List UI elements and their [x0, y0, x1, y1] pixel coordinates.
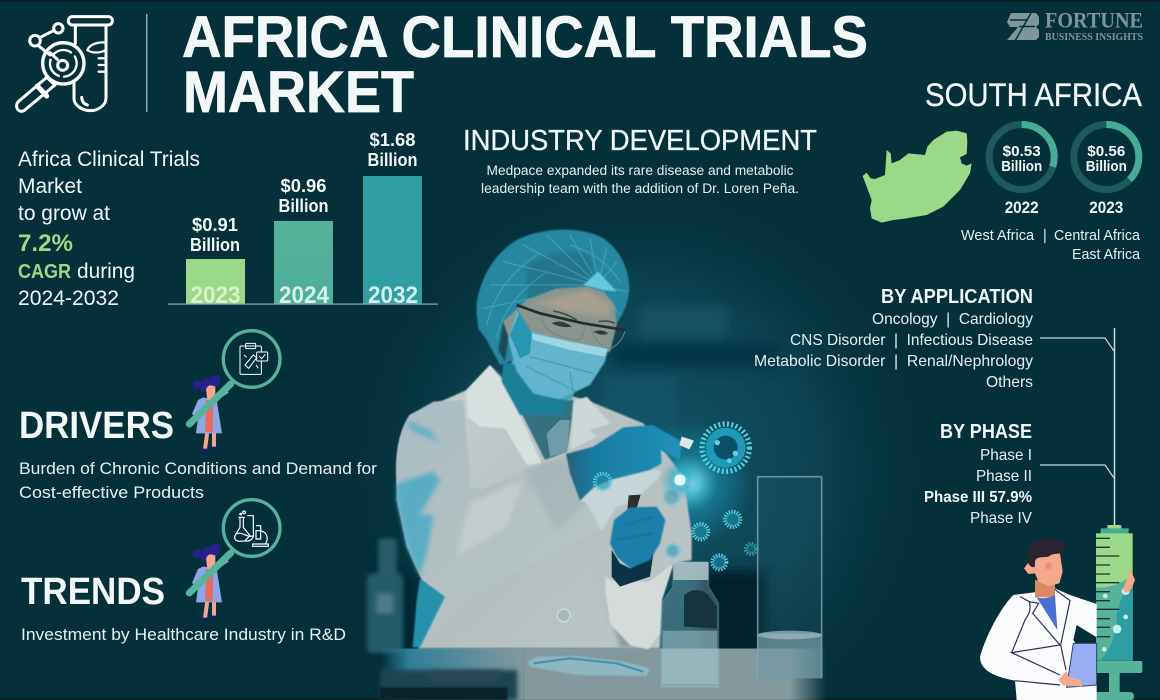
regions list: West Africa — [961, 228, 1035, 244]
CAGR text block: during — [77, 259, 135, 283]
CAGR text block: Market — [18, 174, 82, 198]
ring: 2022 value: 2022 — [1005, 199, 1039, 217]
bar 2032 — [363, 130, 422, 309]
industry development — [463, 125, 817, 196]
logo: Fortune Business Insights: FORTUNE — [1045, 8, 1143, 32]
lower glove — [610, 507, 665, 568]
industry development: leadership team with the addition of Dr. Loren Peña. — [481, 181, 799, 196]
by application — [754, 286, 1033, 391]
drivers heading: DRIVERS — [19, 405, 174, 447]
trends heading: TRENDS — [21, 571, 165, 613]
CAGR text block — [18, 147, 200, 310]
left lapel — [466, 365, 542, 465]
icon: woman with magnifier, trends — [189, 500, 280, 621]
lab background and props — [367, 307, 780, 653]
drivers text: Cost-effective Products — [19, 483, 204, 502]
by application: Metabolic Disorder | Renal/Nephrology — [754, 353, 1033, 370]
clipboard — [1067, 643, 1097, 687]
bar 2023: $0.91 — [192, 215, 238, 235]
logo: Fortune Business Insights: BUSINESS INSIGHTS — [1045, 32, 1143, 43]
coat button — [557, 609, 570, 622]
right lapel — [570, 397, 610, 450]
bar 2023: Billion — [190, 235, 240, 255]
regions list: | — [1043, 228, 1047, 244]
south africa heading: SOUTH AFRICA — [925, 77, 1143, 113]
ring: 2022 value: $0.53 — [1003, 143, 1041, 160]
eyes and glasses — [552, 321, 608, 335]
logo: Fortune Business Insights — [1007, 8, 1143, 43]
bar 2024: $0.96 — [280, 176, 326, 196]
coat lapel outlines — [1012, 589, 1070, 685]
bar chart — [168, 130, 438, 309]
bar 2032: $1.68 — [370, 130, 416, 150]
ring: 2023 value: 2023 — [1089, 199, 1123, 217]
map: South Africa — [863, 131, 972, 223]
ring: 2022 value: Billion — [1001, 158, 1042, 175]
shirt and neck — [490, 365, 573, 460]
sleeve — [396, 400, 601, 599]
coat — [980, 588, 1097, 700]
CAGR text block: 2024-2032 — [18, 286, 119, 310]
doctor with syringe — [980, 525, 1142, 700]
glow, viruses and glassware — [595, 424, 822, 687]
title: AFRICA CLINICAL TRIALS — [182, 5, 868, 70]
lab equipment glyph — [235, 511, 268, 546]
flap — [580, 468, 662, 531]
industry development: INDUSTRY DEVELOPMENT — [463, 125, 817, 157]
upper glove — [566, 425, 682, 501]
regions list: Central Africa — [1054, 228, 1141, 244]
by phase: BY PHASE — [940, 421, 1032, 443]
lab coat body — [396, 365, 692, 648]
title: MARKET — [183, 60, 414, 125]
by phase: Phase IV — [970, 510, 1032, 527]
CAGR text block: to grow at — [18, 201, 110, 225]
ring: 2022 value — [989, 124, 1054, 217]
ring: 2023 value — [1074, 124, 1139, 217]
by phase: Phase I — [980, 447, 1032, 464]
trends text: Investment by Healthcare Industry in R&D — [21, 626, 346, 644]
icon: woman with magnifier, drivers — [189, 331, 280, 452]
hands — [1058, 671, 1082, 687]
header icon: test tube and magnifier — [17, 17, 112, 111]
bar 2024 — [274, 176, 333, 309]
by phase — [924, 421, 1032, 527]
clipboard glyph — [240, 343, 268, 374]
by application: CNS Disorder | Infectious Disease — [790, 332, 1033, 349]
bar 2024: Billion — [278, 196, 328, 216]
by phase: Phase III 57.9% — [924, 489, 1032, 506]
flask — [662, 563, 718, 687]
drivers text: Burden of Chronic Conditions and Demand for — [19, 459, 377, 478]
regions list — [961, 228, 1141, 263]
drivers text — [19, 459, 377, 502]
head in upper crop coordinates — [477, 230, 629, 415]
head — [1024, 553, 1063, 586]
small viruses — [595, 474, 756, 569]
header divider — [146, 14, 148, 112]
CAGR text block: 7.2% — [18, 230, 73, 257]
bar 2032: Billion — [368, 150, 418, 170]
by application: Others — [986, 374, 1033, 391]
bar 2024: 2024 — [279, 282, 330, 309]
title — [182, 5, 868, 125]
bar 2023 — [186, 215, 245, 309]
industry development: Medpace expanded its rare disease and metabolic — [486, 163, 794, 178]
photo: scientist in laboratory — [367, 230, 827, 700]
vial — [627, 495, 641, 511]
by application: Oncology | Cardiology — [872, 311, 1033, 328]
by application: BY APPLICATION — [881, 286, 1033, 308]
cuff — [612, 550, 653, 587]
connector lines — [1040, 328, 1114, 526]
body in lower crop coordinates — [380, 353, 827, 700]
CAGR text block: CAGR — [18, 261, 71, 283]
table — [380, 648, 523, 700]
by phase: Phase II — [976, 468, 1032, 485]
regions list: East Africa — [1072, 247, 1141, 263]
ring: 2023 value: $0.56 — [1087, 143, 1125, 160]
bar 2023: 2023 — [190, 282, 240, 309]
CAGR text block: Africa Clinical Trials — [18, 147, 200, 171]
bar 2032: 2032 — [368, 282, 418, 309]
ring: 2023 value: Billion — [1086, 158, 1127, 175]
beaker — [758, 477, 822, 678]
lower right sleeve — [605, 563, 673, 649]
syringe — [1087, 525, 1142, 700]
virus large — [706, 428, 746, 468]
mask — [508, 310, 608, 399]
